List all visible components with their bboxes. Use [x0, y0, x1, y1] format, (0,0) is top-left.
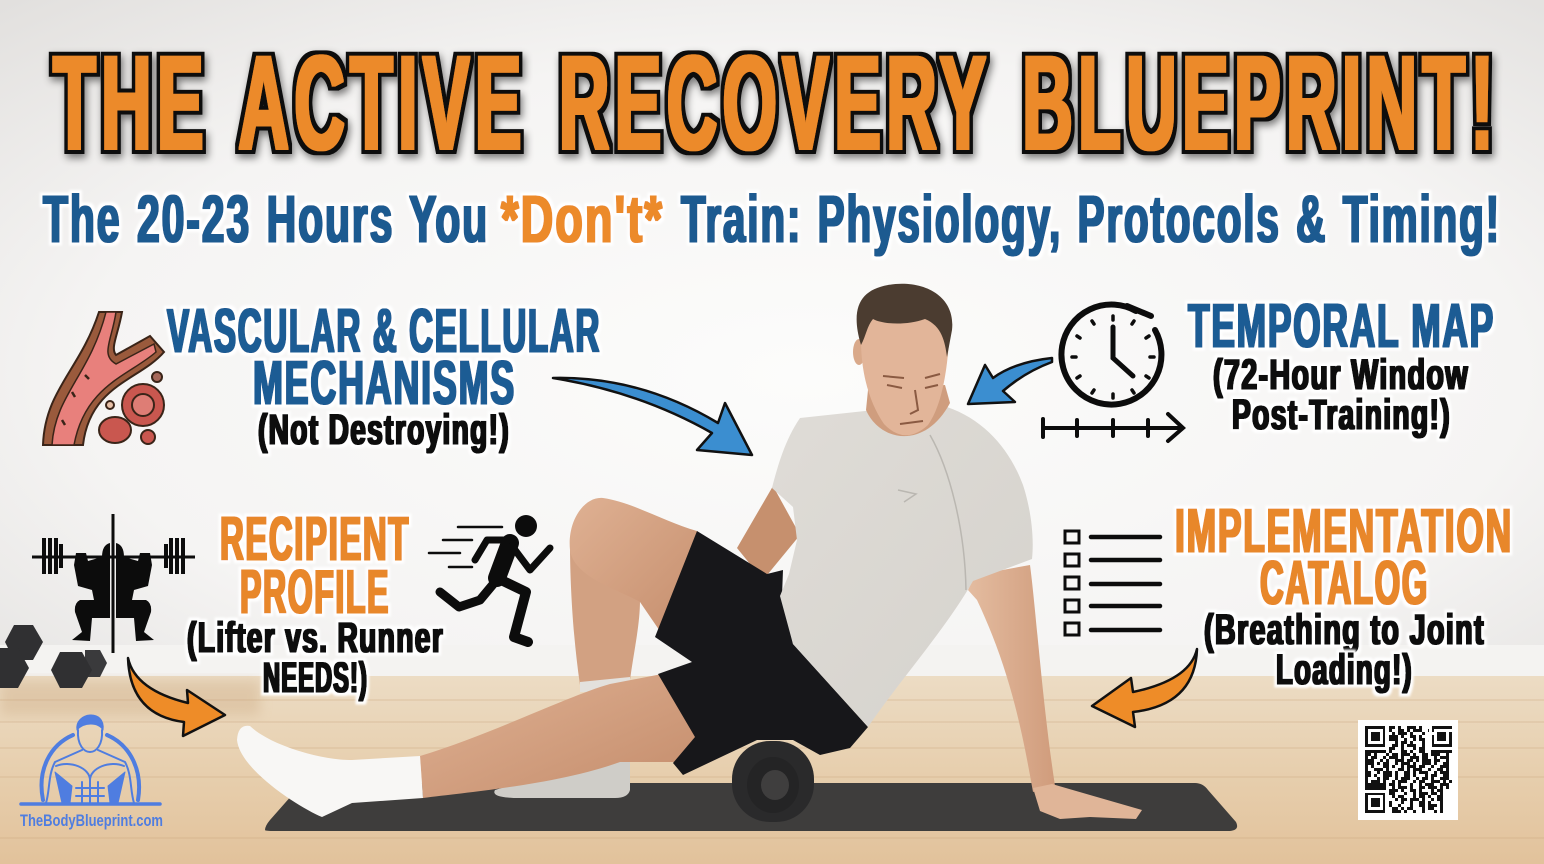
- icon: lifter squat: [32, 514, 195, 653]
- icon: clock and timeline: [1043, 305, 1183, 441]
- panel: implementation catalog: [1065, 497, 1513, 727]
- shorts: [655, 531, 868, 775]
- subtitle: [43, 182, 1501, 257]
- arrow: blue to person: [968, 358, 1052, 404]
- ear: [853, 339, 865, 365]
- caption line 2: NEEDS!): [263, 654, 368, 702]
- shirt sleeve seam and logo: [898, 435, 966, 590]
- arrow: blue to person: [553, 378, 752, 455]
- dumbbells: [0, 625, 107, 688]
- white sock: [237, 726, 423, 817]
- head: [853, 284, 952, 435]
- panel: recipient profile: [32, 505, 550, 736]
- background: baseboard: [0, 645, 1544, 678]
- extended leg: [420, 674, 700, 798]
- face: [861, 295, 950, 435]
- foam roller: [732, 741, 814, 822]
- raised thigh: [570, 498, 710, 640]
- icon: muscular figure: [21, 715, 160, 804]
- icon: blood vessel and cells: [43, 312, 164, 445]
- QR code: [1358, 720, 1458, 820]
- t-shirt: [772, 407, 1033, 727]
- rear sock band: [580, 677, 630, 692]
- heading line 2: MECHANISMS: [253, 349, 516, 418]
- logo: The Body Blueprint: [20, 715, 163, 830]
- background: wooden floor: [0, 676, 1544, 864]
- person foam rolling: [237, 284, 1142, 822]
- caption: (Not Destroying!): [258, 406, 510, 454]
- raised leg shin: [570, 520, 640, 685]
- background: wall: [0, 0, 1544, 680]
- logo text: TheBodyBlueprint.com: [20, 811, 163, 830]
- subtitle: *Don't*: [501, 182, 664, 257]
- heading line 2: PROFILE: [240, 558, 390, 627]
- rear foot: [494, 755, 630, 798]
- icon: runner: [429, 515, 550, 642]
- caption line 2: Loading!): [1276, 646, 1413, 694]
- face features: [883, 374, 940, 424]
- hair: [857, 284, 952, 357]
- subtitle: The 20-23 Hours You: [43, 182, 489, 257]
- neck: [866, 385, 950, 436]
- heading: RECIPIENT: [220, 505, 410, 574]
- panel: vascular and cellular mechanisms: [43, 297, 752, 455]
- hand: [1033, 784, 1142, 819]
- heading: VASCULAR & CELLULAR: [167, 297, 601, 366]
- arrow: orange to person: [128, 658, 225, 736]
- arrow: orange to person: [1092, 649, 1197, 727]
- caption line 1: (Lifter vs. Runner: [187, 614, 444, 662]
- supporting arm: [968, 565, 1055, 792]
- yoga mat: [265, 783, 1237, 831]
- arm behind torso: [737, 486, 800, 580]
- icon: checklist: [1065, 531, 1160, 635]
- panel: temporal map: [968, 292, 1495, 441]
